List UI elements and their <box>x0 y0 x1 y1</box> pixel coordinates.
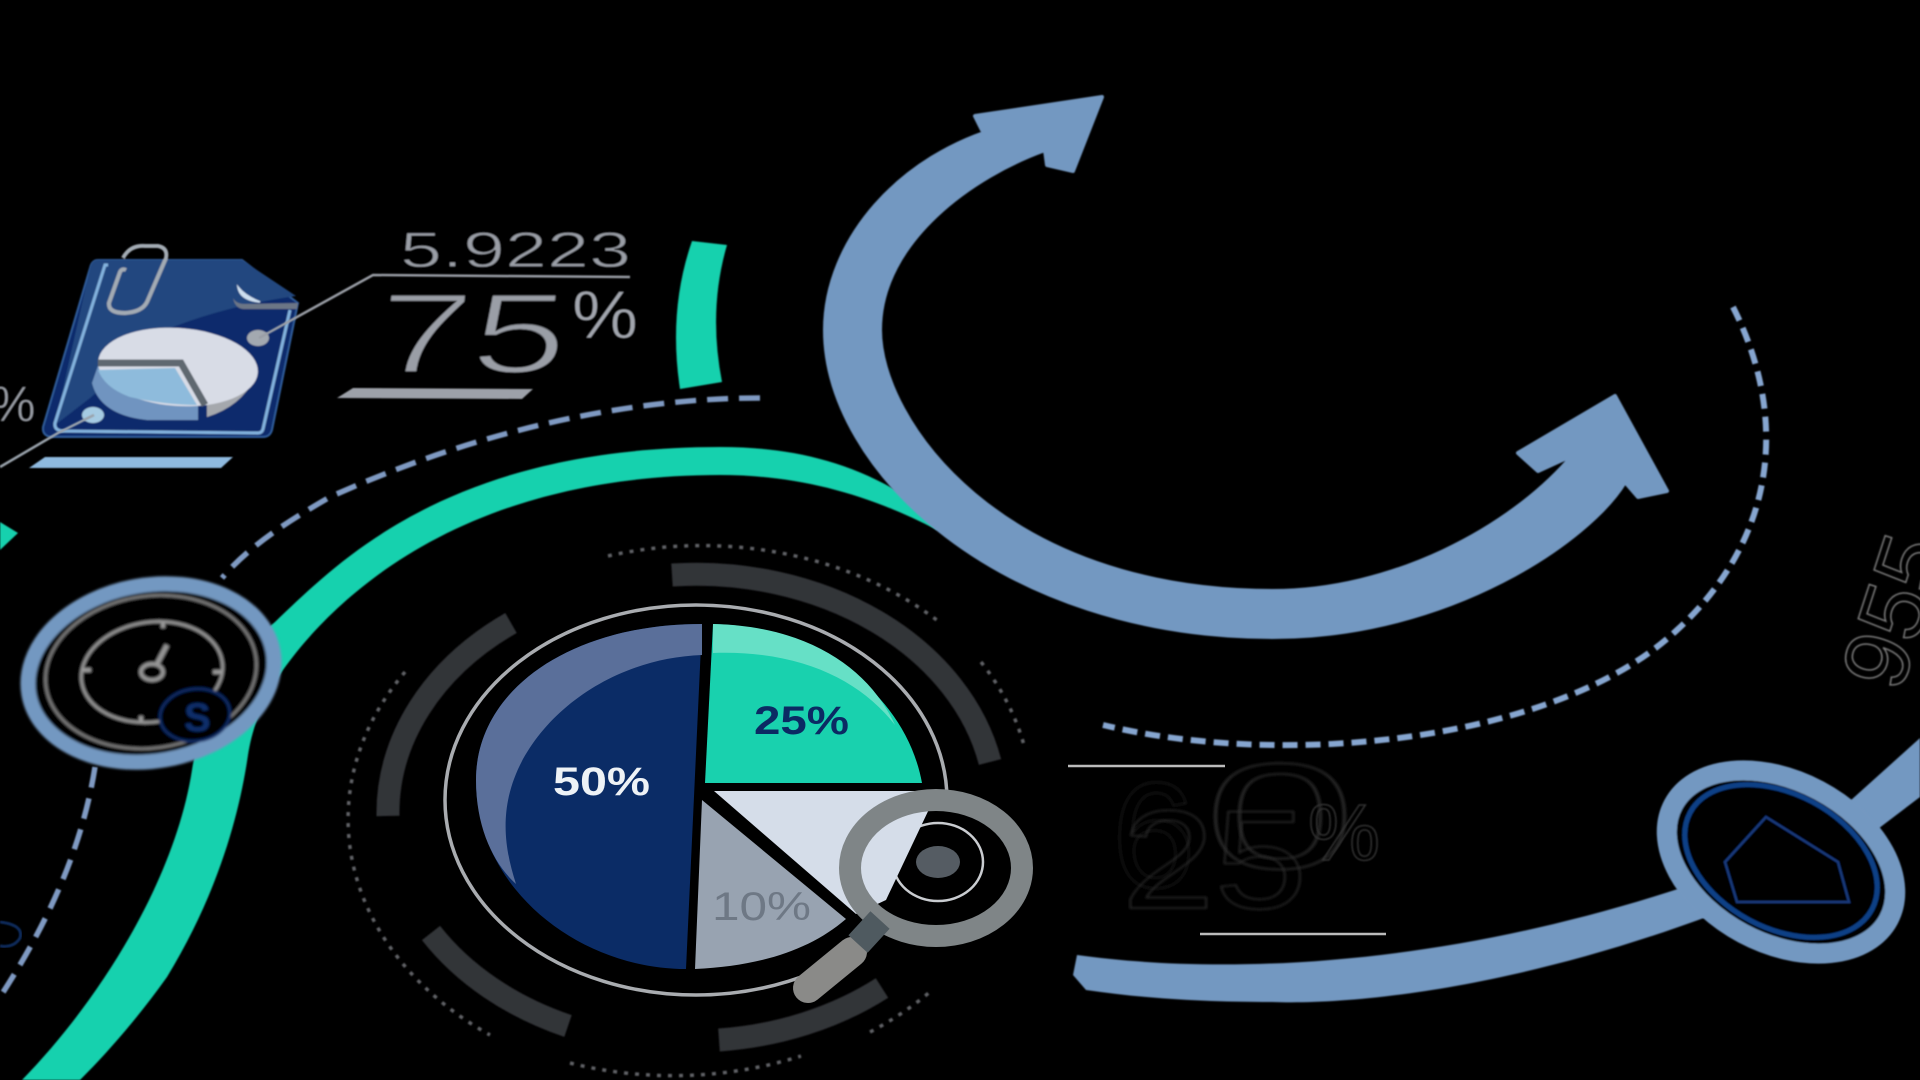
document sheet <box>43 260 298 437</box>
handle <box>808 952 852 988</box>
navy ring <box>1659 753 1903 969</box>
small teal mark at left edge <box>0 522 18 550</box>
callout line: left <box>0 415 94 467</box>
clock ticks <box>82 622 222 722</box>
target centre <box>916 846 960 878</box>
ghost number: 65%: 6 <box>1112 751 1195 919</box>
pentagon icon <box>1725 817 1849 902</box>
label 50%: 50% <box>553 760 650 804</box>
callout dot <box>247 330 269 346</box>
3D pie top <box>95 323 261 411</box>
teal large arc <box>22 447 940 1080</box>
grey ring <box>35 582 267 762</box>
dollar badge <box>157 684 233 746</box>
blue band upper right <box>1840 738 1920 835</box>
teal short arc <box>676 241 727 389</box>
dotted outer ring <box>348 546 1025 1076</box>
handle collar <box>858 920 880 944</box>
home badge <box>1635 733 1920 991</box>
white ring <box>445 605 947 995</box>
label 25%: 25% <box>754 699 849 743</box>
grey line bottom <box>1200 933 1386 935</box>
label 10%: 10% <box>712 885 811 929</box>
3D pie side: blue <box>92 360 198 420</box>
clock dial <box>75 613 229 731</box>
3D pie side: grey <box>207 370 257 417</box>
dashed arc: right <box>1103 307 1766 745</box>
value 75: 75 <box>369 270 575 398</box>
pie chart ring group <box>348 546 1025 1076</box>
callout line: 75% <box>259 275 630 338</box>
sheet highlight <box>55 260 296 425</box>
sheet inner border <box>55 265 290 433</box>
dark segmented ring <box>388 574 990 1040</box>
paperclip <box>109 246 166 313</box>
magnifier <box>714 791 1026 988</box>
clock hand <box>157 645 167 664</box>
3D pie wedge <box>98 368 197 405</box>
ghost percent: % <box>1308 788 1380 877</box>
pie slice: 10% grey <box>695 800 846 969</box>
dollar sign: S <box>184 696 211 740</box>
badge ring <box>14 565 288 781</box>
blue band bottom right <box>1073 885 1712 1002</box>
folded corner strip <box>233 298 298 309</box>
pie slice: 50% navy <box>476 624 702 969</box>
dashed arc small circle <box>0 922 21 946</box>
grey line top <box>1068 765 1225 767</box>
ghost number: 25: 25 <box>1122 781 1307 938</box>
cycle arrow <box>825 97 1667 637</box>
lens background <box>846 798 1026 938</box>
blue underbar <box>29 457 233 468</box>
pie slice: 25% teal <box>705 624 922 783</box>
corner curl <box>238 287 260 302</box>
blue callout dot <box>82 407 104 423</box>
pie slice highlight <box>476 624 702 884</box>
badge ring <box>1635 733 1920 991</box>
grey underbar <box>337 388 533 399</box>
lens frame <box>850 800 1022 936</box>
ghost ring zero: 0 <box>1205 732 1355 900</box>
clock hub <box>141 664 163 680</box>
wedge edge <box>98 363 205 405</box>
dashed arc: upper left <box>0 398 760 997</box>
document icon <box>43 246 298 437</box>
target ring <box>893 823 983 901</box>
percent sign: % <box>572 277 638 353</box>
stopwatch badge <box>14 565 288 781</box>
teal highlight <box>713 624 895 725</box>
value 5.9223: 5.9223 <box>400 222 631 278</box>
pie slice: light wedge <box>714 791 931 914</box>
